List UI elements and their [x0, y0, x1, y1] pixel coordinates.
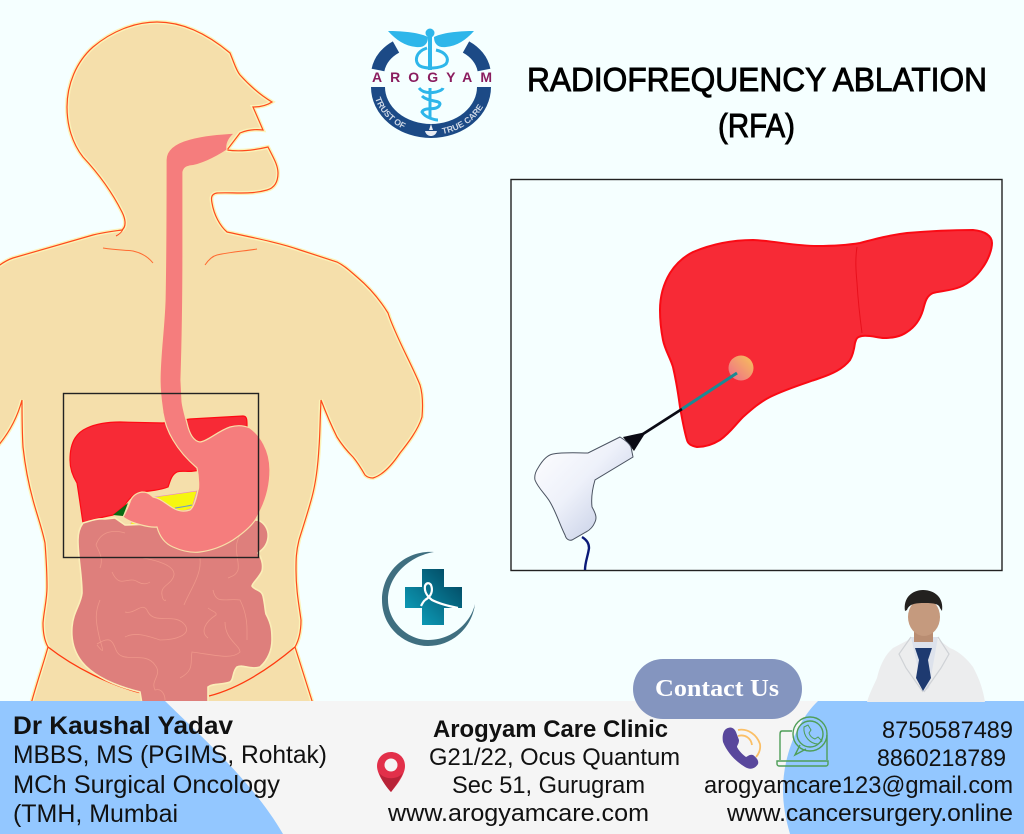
gallbladder and pancreas	[113, 491, 197, 529]
icon: location pin	[377, 752, 405, 792]
text: clinic address: Sec 51, Gurugram	[452, 772, 645, 799]
location box	[64, 394, 258, 558]
icon: laptop with whatsapp	[777, 717, 828, 766]
logo: cancer care cross	[382, 552, 475, 646]
text: contact details: 8860218789	[877, 745, 1006, 772]
logo arc	[382, 552, 475, 646]
logo tagline: TRUST OF	[376, 96, 406, 128]
logo: Arogyam trust: TRUE CARE	[442, 104, 484, 134]
ablation probe	[535, 437, 633, 540]
title: (RFA)	[718, 107, 795, 144]
text: clinic address	[387, 716, 680, 827]
tie	[915, 648, 932, 691]
hair	[905, 590, 942, 611]
contact button	[633, 659, 802, 719]
text: doctor details	[13, 712, 327, 828]
logo lamp	[425, 124, 437, 136]
intestines	[72, 518, 272, 704]
title: RADIOFREQUENCY ABLATION	[527, 61, 987, 98]
text: contact details: www.cancersurgery.online	[726, 800, 1013, 827]
doctor photo	[867, 590, 985, 702]
face	[908, 598, 940, 636]
liver	[660, 230, 992, 447]
logo ring	[378, 47, 396, 70]
logo cross	[405, 569, 462, 625]
neck	[914, 628, 933, 642]
liver lobe line	[856, 247, 862, 333]
esophagus and stomach	[123, 133, 270, 552]
liver in body	[70, 416, 247, 523]
lapels	[899, 637, 949, 692]
needle	[623, 373, 737, 451]
panel: liver ablation diagram	[511, 180, 1002, 570]
tumour	[728, 356, 754, 380]
body silhouette	[0, 22, 423, 704]
text: contact details	[704, 717, 1013, 827]
text: doctor details: MBBS, MS (PGIMS, Rohtak)	[13, 741, 327, 769]
logo ribbon	[421, 583, 458, 608]
text: doctor details: Dr Kaushal Yadav	[13, 712, 233, 740]
intestine folds	[96, 531, 247, 700]
probe cable	[582, 537, 589, 570]
title	[527, 61, 987, 144]
text: contact details: arogyamcare123@gmail.com	[704, 772, 1013, 799]
logo: Arogyam trust	[371, 28, 492, 138]
text: clinic address: www.arogyamcare.com	[387, 800, 649, 827]
shirt	[911, 637, 938, 692]
illustration: human body with digestive organs	[0, 22, 423, 704]
logo name: AROGYAM	[372, 69, 492, 85]
icon: phone	[723, 728, 760, 769]
text: clinic address: G21/22, Ocus Quantum	[429, 744, 680, 771]
text: contact details: 8750587489	[882, 717, 1013, 744]
text: clinic address: Arogyam Care Clinic	[433, 716, 668, 743]
clavicle and belt lines	[48, 229, 295, 696]
coat	[867, 638, 985, 702]
text: doctor details: (TMH, Mumbai	[13, 800, 178, 828]
text: doctor details: MCh Surgical Oncology	[13, 771, 280, 799]
footer band	[0, 701, 1024, 834]
contact button: Contact Us	[655, 676, 779, 702]
panel frame	[511, 180, 1002, 570]
caduceus	[388, 28, 474, 120]
